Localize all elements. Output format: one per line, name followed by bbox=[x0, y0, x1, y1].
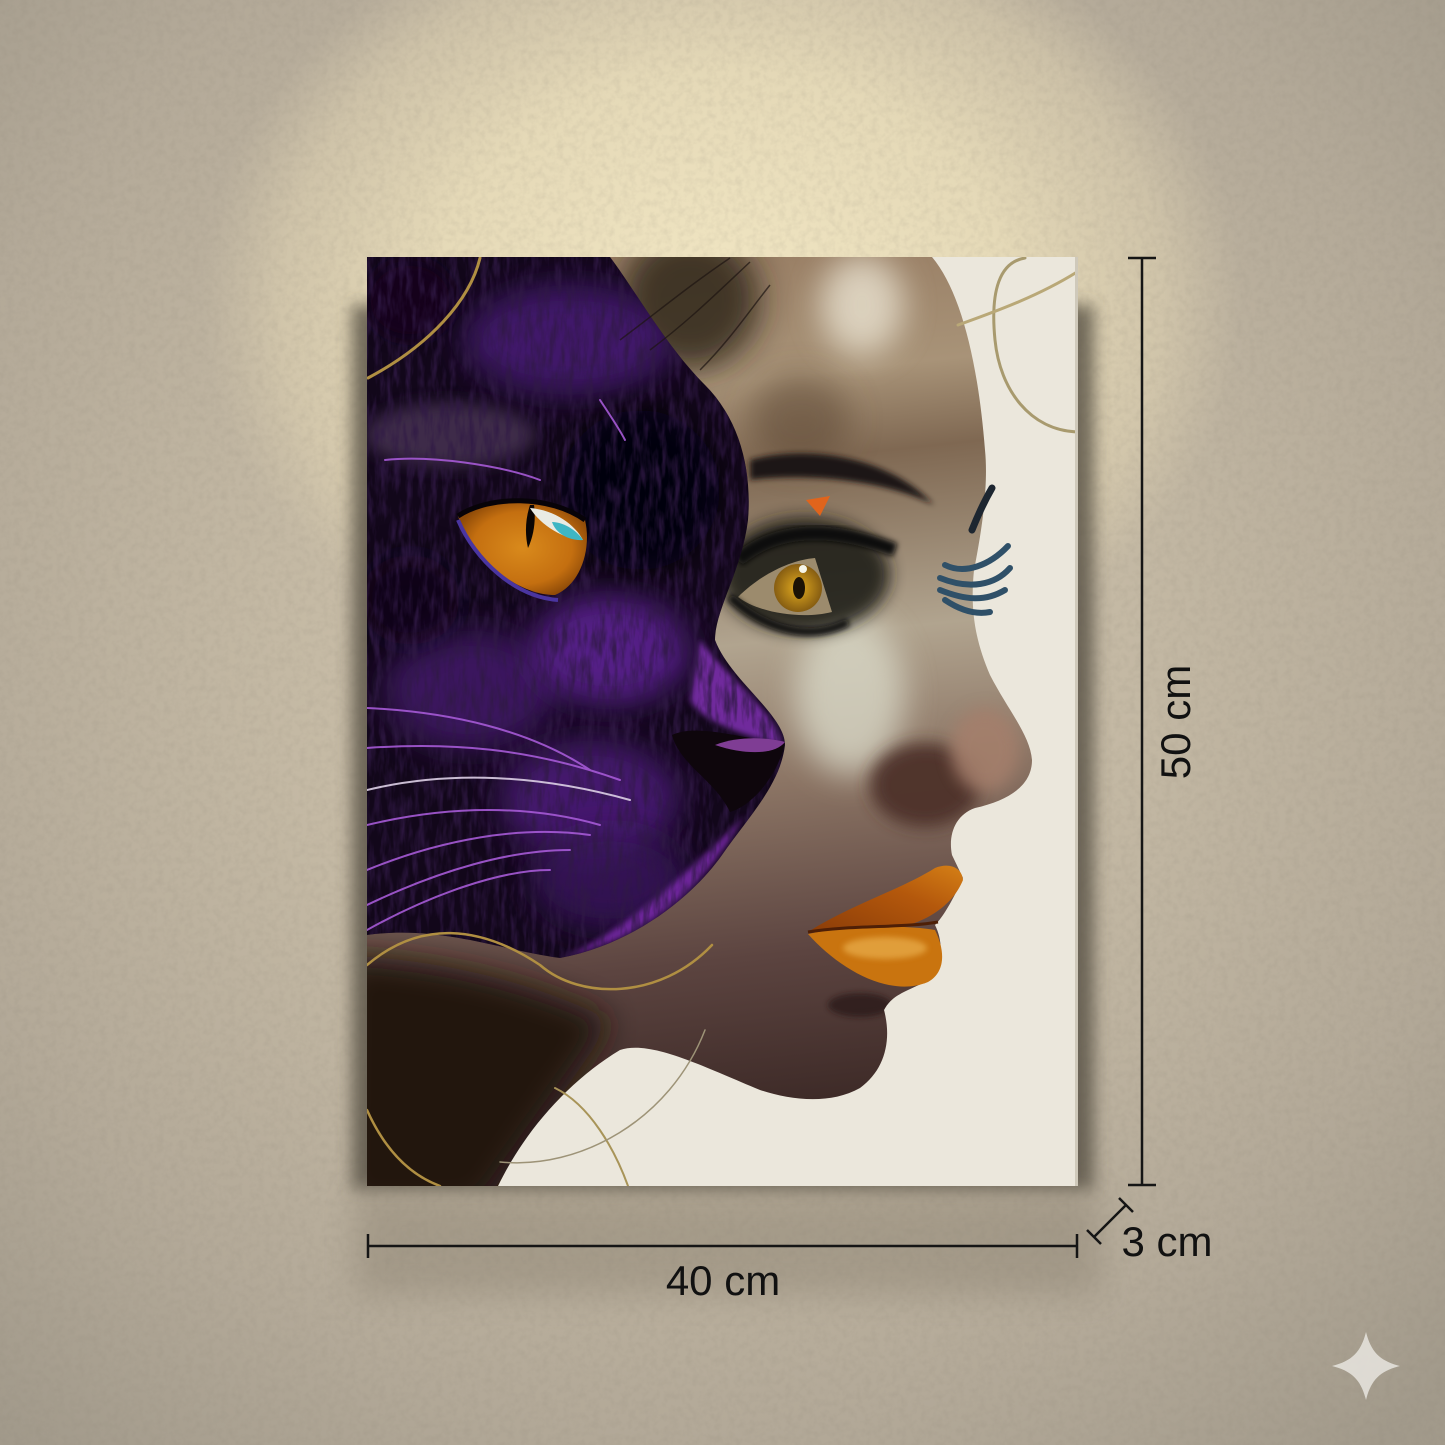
cheek highlight bbox=[795, 615, 905, 775]
purple fur glow bbox=[465, 285, 675, 395]
forehead highlight bbox=[820, 255, 904, 355]
brow bone shading bbox=[750, 375, 850, 465]
eyebrow bbox=[750, 454, 934, 505]
white painted background bbox=[498, 257, 1075, 1186]
icon: sparkle watermark bbox=[1332, 1332, 1400, 1400]
far-side eyelashes bbox=[940, 488, 1010, 613]
nose shadow bbox=[870, 743, 980, 827]
woman's head and neck bbox=[367, 257, 1032, 1186]
fur texture bbox=[367, 257, 787, 962]
dimension: width 40 cm bbox=[368, 1234, 1077, 1304]
dimension: width 40 cm: 40 cm bbox=[666, 1257, 780, 1304]
neck shadow bbox=[340, 955, 610, 1210]
woman's eye bbox=[720, 517, 895, 633]
dark forehead shadow bbox=[560, 410, 720, 570]
cat eye bbox=[458, 501, 587, 600]
orange eyeshadow spot bbox=[806, 496, 830, 516]
dimension: depth 3 cm: 3 cm bbox=[1121, 1218, 1213, 1265]
canvas drop shadow bbox=[352, 305, 1100, 1295]
cat face bbox=[360, 257, 787, 962]
gold lines bbox=[367, 258, 1077, 1186]
canvas artwork bbox=[340, 230, 1077, 1210]
hair shadow at hairline bbox=[620, 230, 760, 370]
cat whiskers bbox=[367, 400, 630, 930]
dimension: depth 3 cm bbox=[1087, 1198, 1213, 1265]
dimension: height 50 cm bbox=[1128, 258, 1199, 1185]
canvas right edge highlight bbox=[1075, 257, 1078, 1186]
fine hair strands bbox=[620, 258, 770, 370]
cat nose bbox=[672, 731, 785, 812]
dimension: height 50 cm: 50 cm bbox=[1152, 665, 1199, 779]
lips bbox=[808, 866, 963, 987]
chin shadow under lip bbox=[828, 993, 892, 1017]
